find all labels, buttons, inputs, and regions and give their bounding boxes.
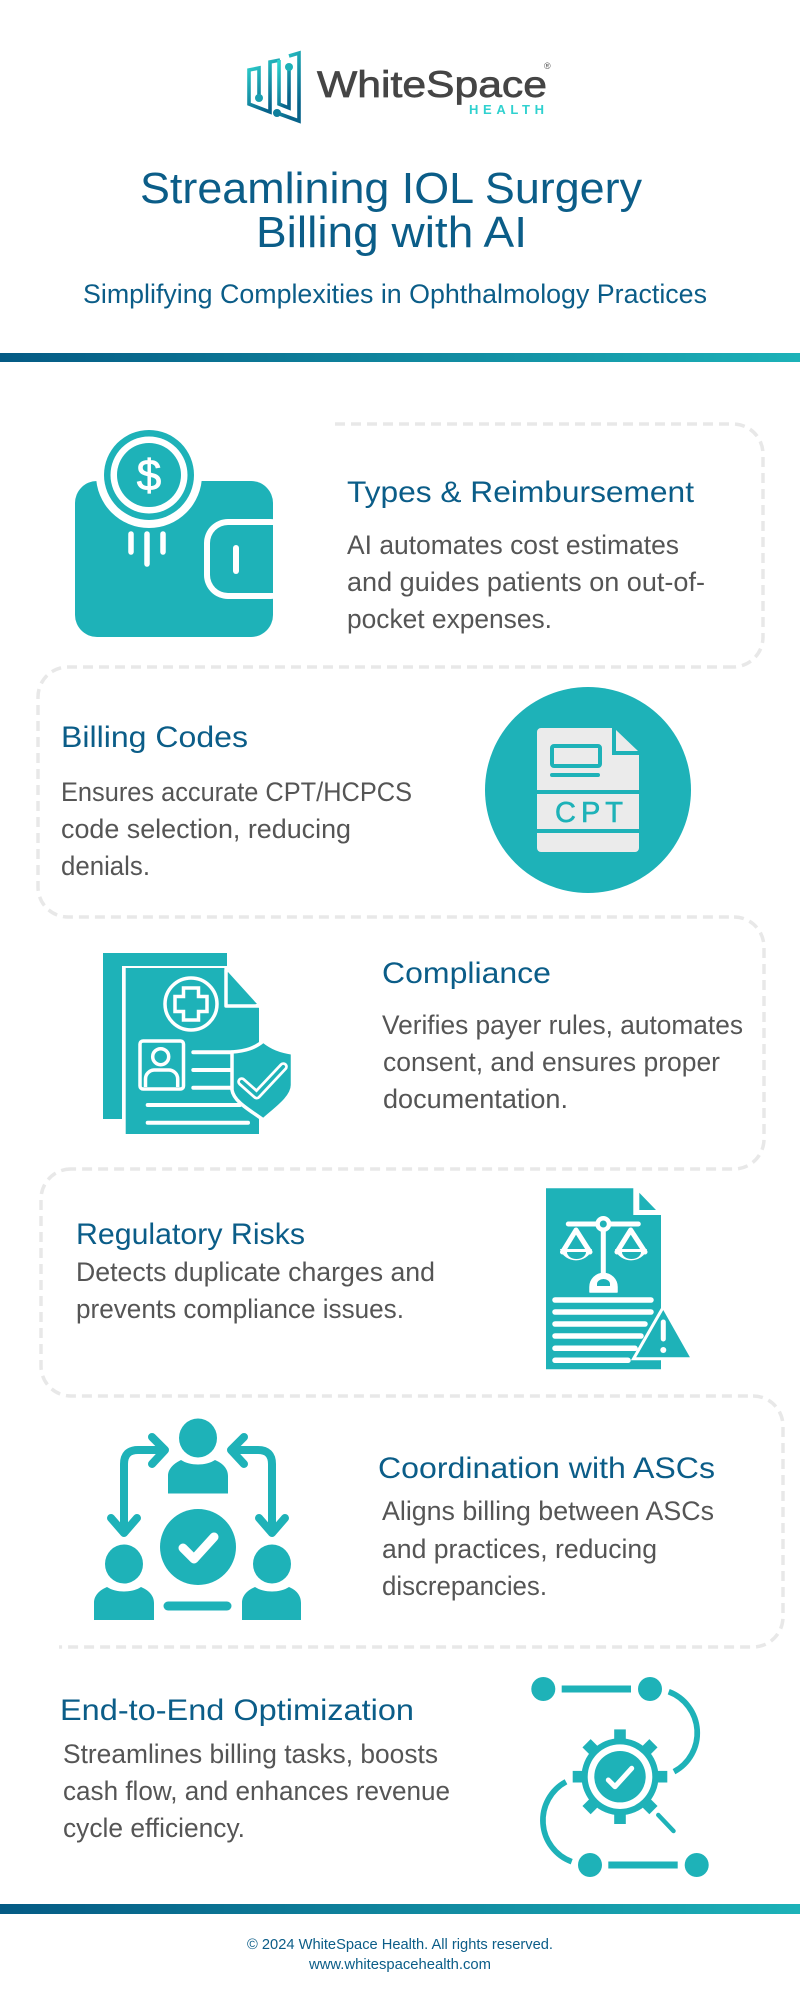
heading: Compliance — [382, 957, 551, 990]
icon: wallet with coin: $ — [137, 451, 161, 500]
body text: prevents compliance issues. — [76, 1294, 404, 1324]
body text — [76, 1257, 435, 1324]
body text: Ensures accurate CPT/HCPCS — [61, 777, 412, 807]
icon: medical document with shield — [103, 953, 292, 1134]
heading: Coordination with ASCs — [378, 1452, 715, 1485]
icon: wallet with coin — [75, 422, 303, 637]
body text: and practices, reducing — [382, 1534, 657, 1564]
body text: pocket expenses. — [347, 604, 552, 634]
body text — [382, 1010, 743, 1114]
footer: www.whitespacehealth.com — [308, 1956, 491, 1973]
body text: code selection, reducing — [61, 814, 351, 844]
panel: compliance — [71, 917, 764, 1169]
body text: AI automates cost estimates — [347, 530, 679, 560]
body text: and guides patients on out-of- — [347, 567, 705, 597]
body text — [63, 1739, 450, 1843]
panel: regulatory risks — [41, 1169, 753, 1396]
body text: Verifies payer rules, automates — [382, 1010, 743, 1040]
body text: Aligns billing between ASCs — [382, 1496, 714, 1526]
title: Streamlining IOL Surgery — [140, 164, 642, 213]
registered mark: ® — [544, 61, 551, 71]
panel: end-to-end optimization — [60, 1677, 709, 1877]
top gradient bar — [0, 353, 800, 362]
panel: types and reimbursement — [75, 422, 763, 667]
body text: documentation. — [383, 1084, 568, 1114]
body text: cycle efficiency. — [63, 1813, 245, 1843]
body text — [382, 1496, 714, 1601]
icon: three people with arrows — [94, 1418, 301, 1620]
panel: coordination with ASCs — [59, 1396, 783, 1647]
heading: Types & Reimbursement — [347, 476, 695, 509]
logo sub-wordmark: HEALTH — [469, 102, 544, 117]
logo wordmark: WhiteSpace — [317, 64, 547, 105]
logo — [249, 53, 551, 121]
subtitle: Simplifying Complexities in Ophthalmology Practices — [83, 279, 707, 309]
body text: Detects duplicate charges and — [76, 1257, 435, 1287]
body text: Streamlines billing tasks, boosts — [63, 1739, 438, 1769]
icon: legal document with warning — [546, 1188, 692, 1369]
title — [140, 164, 642, 257]
body text: consent, and ensures proper — [383, 1047, 720, 1077]
panel: billing codes — [38, 667, 734, 917]
body text: cash flow, and enhances revenue — [63, 1776, 450, 1806]
footer — [247, 1936, 553, 1973]
heading: Billing Codes — [61, 721, 248, 754]
body text: discrepancies. — [382, 1571, 547, 1601]
logo mark — [249, 53, 299, 121]
heading: End-to-End Optimization — [60, 1694, 414, 1727]
body text — [61, 777, 412, 881]
bottom gradient bar — [0, 1904, 800, 1914]
footer: © 2024 WhiteSpace Health. All rights reserved. — [247, 1936, 553, 1953]
title: Billing with AI — [256, 208, 527, 257]
icon: CPT document — [485, 687, 691, 893]
icon: CPT document: CPT — [555, 797, 623, 829]
icon: process gear with check — [531, 1677, 709, 1877]
heading: Regulatory Risks — [76, 1218, 305, 1251]
body text: denials. — [61, 851, 150, 881]
body text — [347, 530, 705, 634]
